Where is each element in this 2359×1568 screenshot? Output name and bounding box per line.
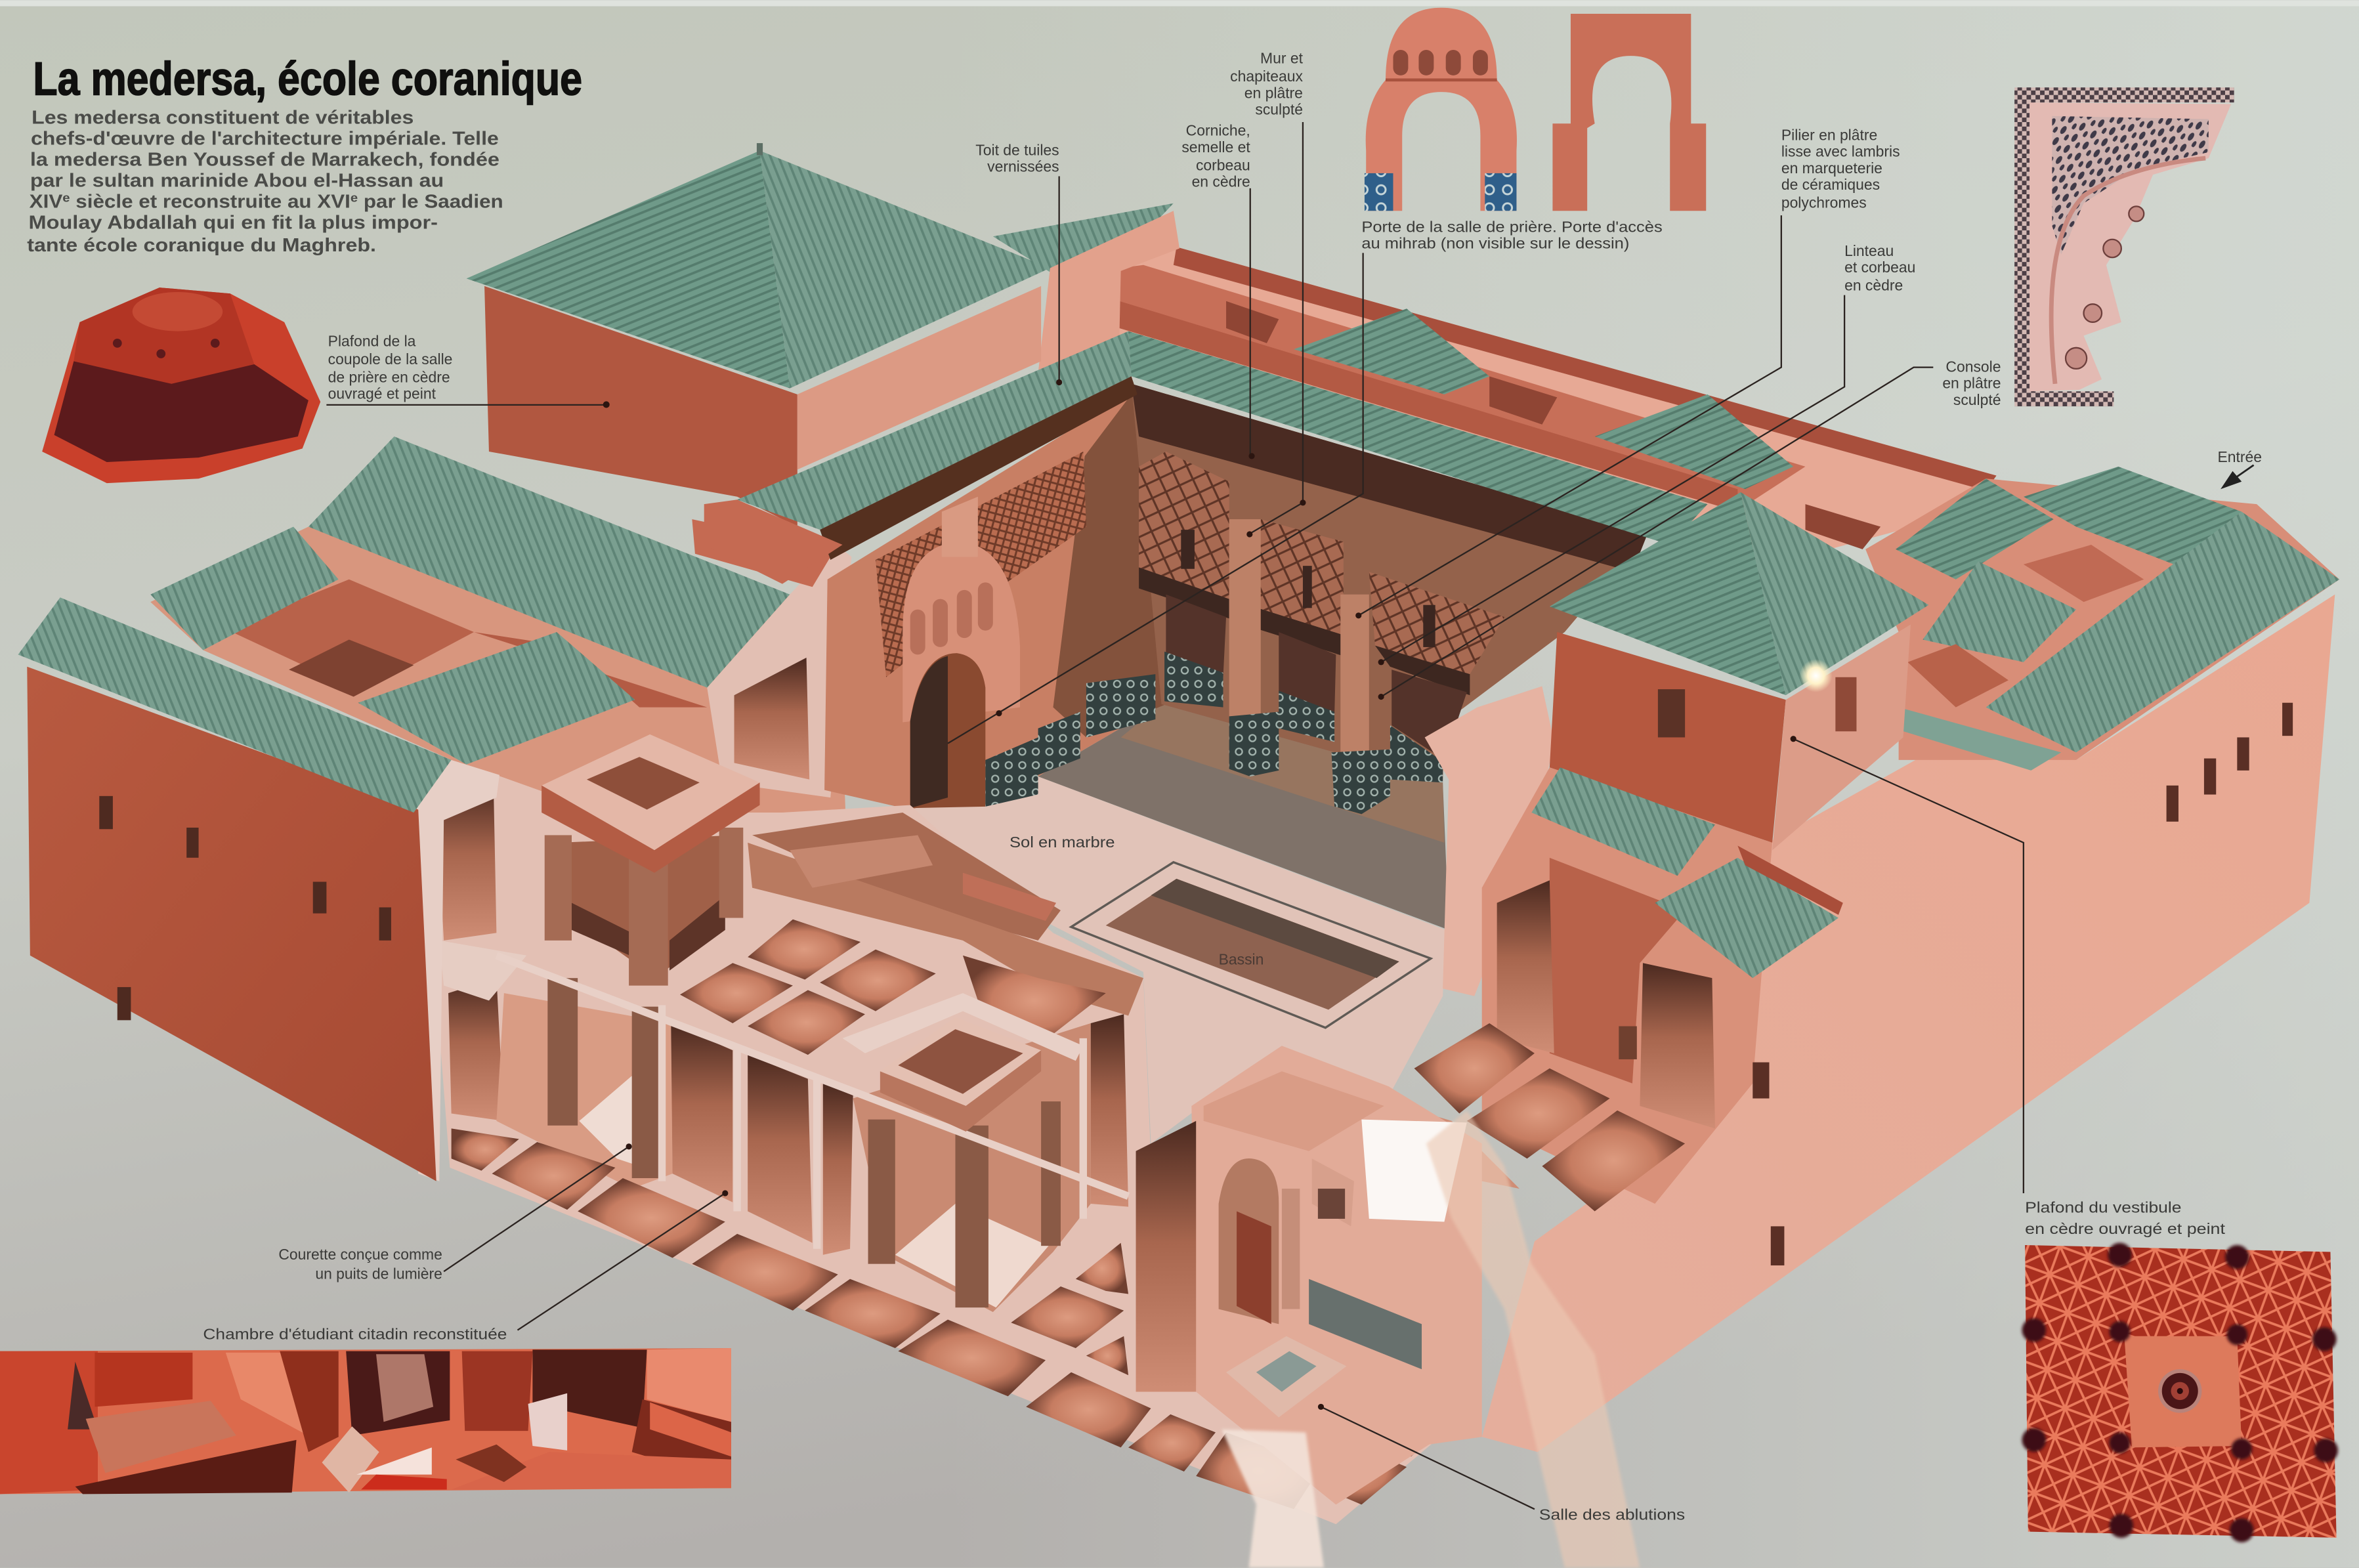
illustration: long east wall bbox=[1482, 595, 2335, 1452]
label: dome ceiling: Plafond de la bbox=[328, 333, 416, 350]
label: dome ceiling: coupole de la salle bbox=[328, 350, 452, 368]
illustration: small rear roofs bbox=[1294, 308, 1793, 489]
illustration: west block roof bbox=[18, 597, 452, 813]
label: vestibule ceiling: Plafond du vestibule bbox=[2025, 1199, 2182, 1216]
label: dome ceiling: ouvragé et peint bbox=[328, 385, 436, 402]
intro text block: Moulay Abdallah qui en fit la plus impor- bbox=[29, 213, 438, 234]
intro text block: par le Saadien bbox=[358, 192, 503, 213]
intro text block: tante école coranique du Maghreb. bbox=[27, 235, 376, 256]
intro text block: par le sultan marinide Abou el-Hassan au bbox=[30, 171, 444, 192]
label: roof tiles bbox=[975, 141, 1059, 175]
icon: mihrab access door drawing bbox=[1552, 14, 1706, 211]
intro text block: XIV bbox=[30, 192, 59, 213]
illustration: student rooms cutaway bbox=[496, 956, 1128, 1312]
label: lintel bbox=[1844, 242, 1915, 294]
label: console bbox=[1942, 358, 2001, 408]
illustration: window slits on east wall bbox=[1753, 703, 2293, 1265]
illustration: east rooms bbox=[1376, 767, 1843, 1211]
illustration: pale pier right of courtyard bbox=[1425, 687, 1554, 996]
label: plaster pillar: de céramiques bbox=[1781, 176, 1880, 193]
illustration: courtyard west facade bbox=[824, 394, 1166, 809]
illustration: floor cells along south edge bbox=[452, 1128, 1449, 1509]
illustration: upper lantern courtyard bbox=[542, 734, 760, 986]
label: doors: Porte de la salle de prière. Porte d'accès bbox=[1361, 218, 1663, 235]
illustration: west block section cut bbox=[414, 760, 499, 1181]
label: small courtyard: Courette conçue comme bbox=[278, 1246, 442, 1263]
label: doors bbox=[1361, 218, 1663, 252]
illustration: cut wall and dark room near courtyard bbox=[692, 519, 851, 797]
intro text block: chefs-d'œuvre de l'architecture impériale. Telle bbox=[31, 128, 499, 149]
label: roof tiles: vernissées bbox=[987, 158, 1059, 175]
illustration: courtyard roof bands bbox=[704, 331, 1708, 584]
label: entrance with arrow: Entrée bbox=[2218, 448, 2262, 465]
illustration: flash glare bbox=[1799, 659, 1833, 692]
illustration: prayer hall pyramid roof bbox=[467, 143, 1050, 389]
panel: student room illustration bbox=[0, 1348, 731, 1494]
intro text block: la medersa Ben Youssef de Marrakech, fondée bbox=[30, 149, 499, 170]
leader lines bbox=[326, 122, 2024, 1509]
label: console: Console bbox=[1945, 358, 2001, 375]
illustration: water basin bbox=[1071, 862, 1431, 1028]
label: small courtyard: un puits de lumière bbox=[315, 1265, 442, 1282]
illustration: entrance complex bbox=[1865, 467, 2339, 771]
label: wall and capitals: sculpté bbox=[1255, 101, 1303, 118]
illustration: ceiling cells over rooms bbox=[680, 920, 1106, 1055]
illustration: reflected arm bbox=[1426, 1111, 1640, 1568]
intro text block: siècle et reconstruite au XVI bbox=[70, 192, 351, 213]
title: La medersa, école coranique bbox=[33, 54, 582, 106]
label: console: sculpté bbox=[1953, 391, 2001, 408]
illustration: south section base bbox=[421, 775, 1482, 1524]
label: wall and capitals: Mur et bbox=[1260, 50, 1304, 67]
label: student room: Chambre d'étudiant citadin reconstituée bbox=[203, 1325, 507, 1342]
panel: vestibule ceiling bbox=[2022, 1243, 2338, 1542]
label: plaster pillar: polychromes bbox=[1781, 194, 1867, 211]
illustration: courtyard floor bbox=[910, 704, 1449, 1143]
label: wall and capitals: en plâtre bbox=[1244, 84, 1303, 101]
label: cornice: semelle et bbox=[1181, 138, 1250, 156]
label: dome ceiling: de prière en cèdre bbox=[328, 369, 450, 386]
illustration: small back roof bbox=[993, 203, 1174, 274]
icon: prayer hall door drawing bbox=[1365, 8, 1517, 211]
intro text block: Les medersa constituent de véritables bbox=[32, 107, 414, 128]
leader end dots bbox=[603, 379, 1796, 1410]
label: plaster pillar: en marqueterie bbox=[1781, 159, 1882, 177]
label: console: en plâtre bbox=[1942, 375, 2001, 392]
label: small courtyard bbox=[278, 1246, 442, 1282]
illustration: lower lantern courtyard bbox=[843, 993, 1083, 1132]
illustration: west wing roofs bbox=[150, 436, 790, 765]
label: lintel: Linteau bbox=[1844, 242, 1894, 259]
label: lintel: et corbeau bbox=[1844, 259, 1915, 276]
illustration: corner tower walls bbox=[1550, 625, 1911, 850]
intro text block bbox=[27, 107, 503, 256]
label: cornice: en cèdre bbox=[1192, 173, 1250, 190]
illustration: courtyard pillars bbox=[1229, 519, 1390, 814]
illustration: west block wall bbox=[27, 667, 436, 1181]
label: vestibule ceiling bbox=[2025, 1199, 2226, 1237]
illustration: zellige tile dados bbox=[985, 652, 1443, 807]
label: wall and capitals: chapiteaux bbox=[1230, 68, 1303, 85]
label: vestibule ceiling: en cèdre ouvragé et peint bbox=[2025, 1220, 2226, 1237]
label: roof tiles: Toit de tuiles bbox=[975, 141, 1059, 158]
label: cornice: Corniche, bbox=[1186, 122, 1250, 139]
label: dome ceiling bbox=[328, 333, 452, 402]
label: entrance with arrow bbox=[2218, 448, 2262, 489]
label: plaster pillar: lisse avec lambris bbox=[1781, 143, 1900, 160]
label: cornice: corbeau bbox=[1196, 156, 1250, 173]
label: ablutions hall: Salle des ablutions bbox=[1539, 1506, 1685, 1523]
intro text block: e bbox=[351, 190, 358, 204]
illustration: reflected hand bbox=[1222, 1430, 1324, 1568]
label: cornice bbox=[1181, 122, 1250, 190]
icon: painted dome ceiling bbox=[42, 287, 320, 483]
illustration: prayer hall walls bbox=[484, 286, 1041, 527]
illustration: white reflection of phone bbox=[1361, 1120, 1467, 1221]
illustration: corner tower pyramid roof bbox=[1550, 492, 1928, 695]
icon: sculpted plaster console bbox=[2014, 87, 2234, 406]
label: plaster pillar bbox=[1781, 126, 1900, 211]
intro text block: e bbox=[62, 190, 70, 204]
label: doors: au mihrab (non visible sur le dessin) bbox=[1361, 235, 1629, 252]
illustration: prayer hall arched door bbox=[910, 653, 985, 808]
label: plaster pillar: Pilier en plâtre bbox=[1781, 126, 1877, 143]
label: marble floor: Sol en marbre bbox=[1009, 834, 1115, 851]
label: basin: Bassin bbox=[1219, 951, 1264, 968]
illustration: west wing base bbox=[150, 527, 845, 903]
illustration: rear terrace bbox=[1119, 247, 1997, 560]
label: wall and capitals bbox=[1230, 50, 1304, 118]
illustration: ablutions hall bbox=[1136, 1046, 1482, 1504]
label: lintel: en cèdre bbox=[1844, 277, 1903, 294]
illustration: back wall of domed prayer hall bbox=[1038, 211, 1180, 373]
illustration: courtyard back wall bbox=[1132, 384, 1647, 782]
